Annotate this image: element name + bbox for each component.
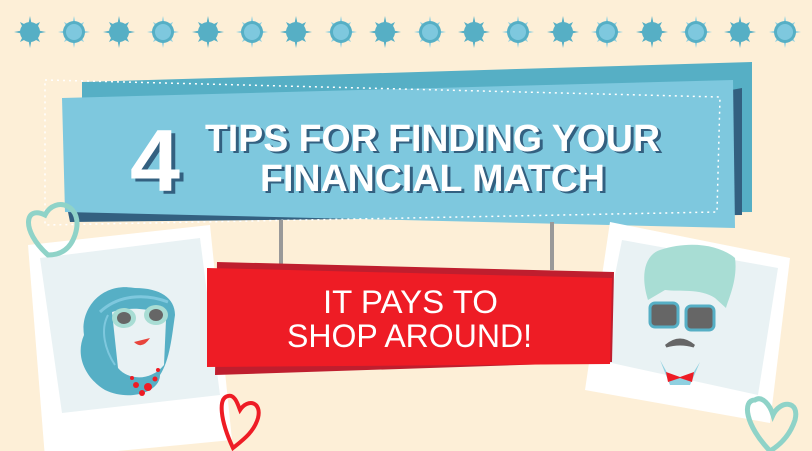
red sign — [207, 262, 614, 375]
right polaroid — [585, 222, 790, 423]
heart: red — [222, 396, 259, 448]
star border row — [14, 16, 801, 48]
title text: TIPS FOR FINDING YOUR — [208, 120, 663, 162]
woman illustration — [81, 287, 175, 396]
title banner — [45, 62, 752, 228]
title text: 4 — [134, 114, 184, 213]
left polaroid — [28, 225, 232, 451]
title text: 4 — [130, 111, 180, 210]
sign text: IT PAYS TO — [323, 284, 498, 320]
title text: FINANCIAL MATCH — [263, 160, 608, 202]
man illustration — [644, 245, 736, 385]
red sign: SHOP AROUND! — [287, 318, 532, 354]
poles — [279, 220, 554, 270]
title text: FINANCIAL MATCH — [260, 158, 605, 200]
title text — [130, 111, 663, 213]
heart: teal bottom-right — [747, 399, 796, 451]
heart: teal top-left — [28, 205, 77, 255]
title text: TIPS FOR FINDING YOUR — [205, 118, 660, 160]
